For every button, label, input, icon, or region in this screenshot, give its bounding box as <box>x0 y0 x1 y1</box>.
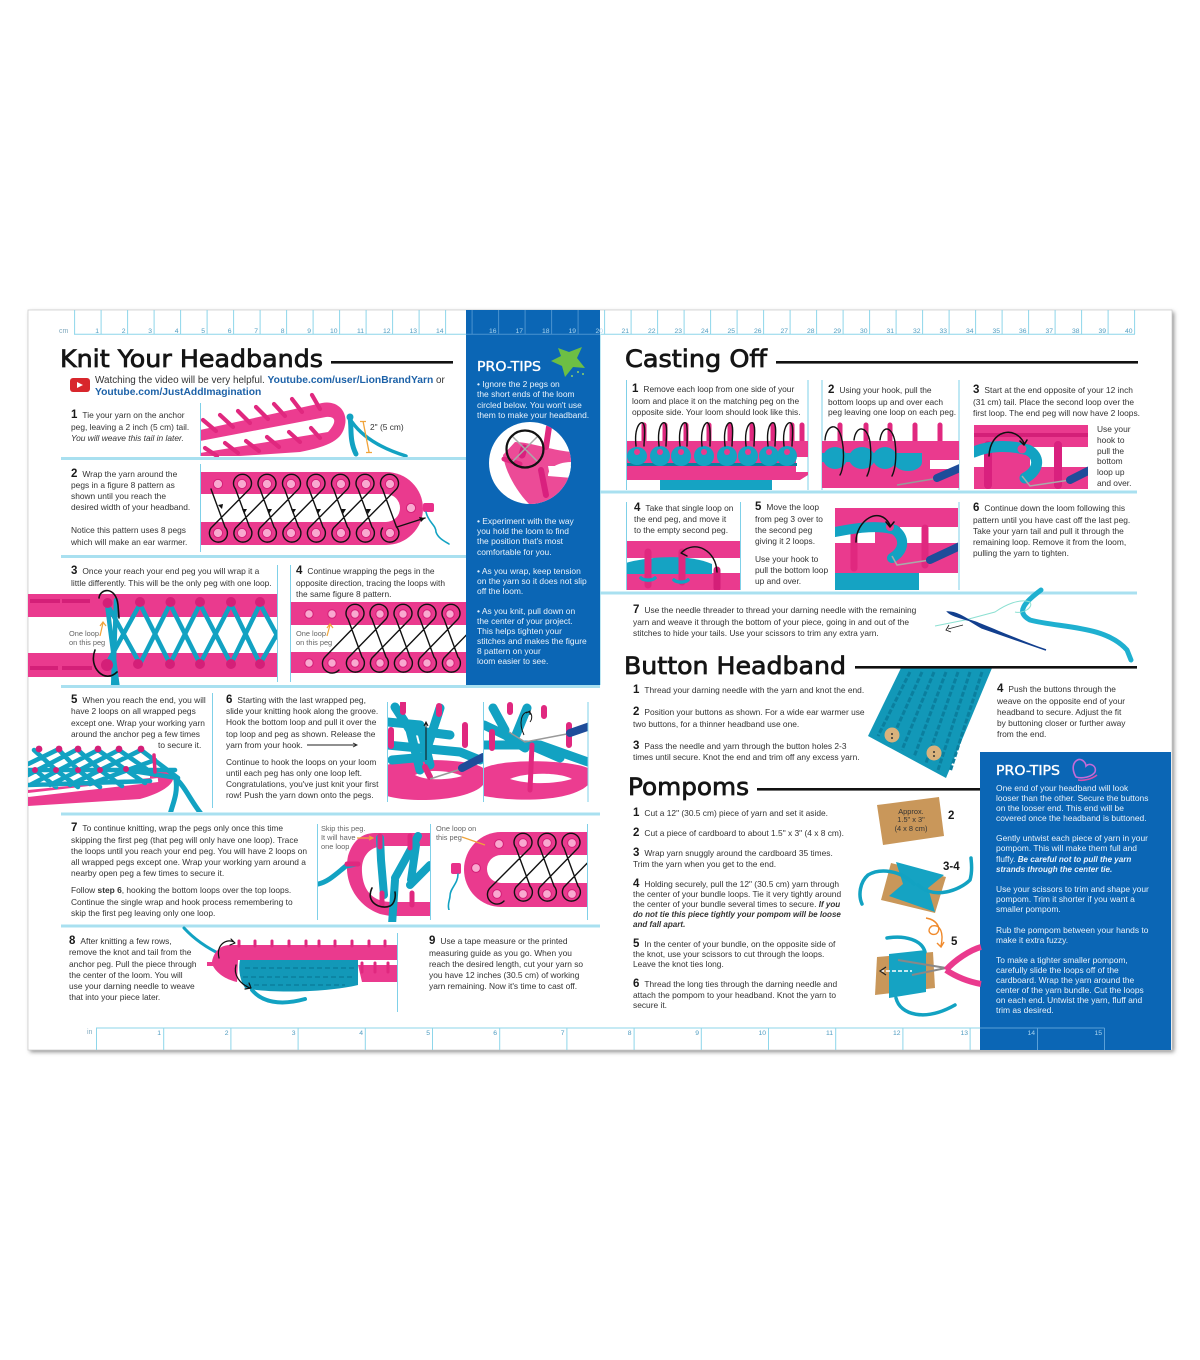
casting step 5 text: pull the bottom loop <box>755 565 828 575</box>
tips text: One end of your headband will look <box>996 783 1129 793</box>
pompom steps text <box>633 807 844 1010</box>
step 9 text <box>429 935 583 991</box>
label: skip peg: one loop <box>321 842 349 851</box>
casting step 1 text: 1 Remove each loop from one side of your <box>632 383 794 395</box>
step 5 text: 5 When you reach the end, you will <box>71 694 206 706</box>
ruler: centimetres: 5 <box>201 328 205 335</box>
step 5 text: except one. Wrap your working yarn <box>71 718 205 728</box>
step 7 text <box>71 822 307 918</box>
step 3 text: 3 Once your reach your end peg you will wrap it a <box>71 565 260 577</box>
heading: pompoms: Pompoms <box>628 773 749 801</box>
casting step 3 side text: hook to <box>1097 435 1125 445</box>
ruler: centimetres: cm <box>59 328 68 335</box>
casting step 2 text <box>828 384 956 417</box>
casting step 5 text: Use your hook to <box>755 554 819 564</box>
step 5 text <box>71 694 206 750</box>
photo: peg three to peg two <box>835 508 960 590</box>
ruler: centimetres: 31 <box>886 328 894 335</box>
step 9 text: yarn remaining. Now it's time to cast off. <box>429 981 577 991</box>
tips text: pompom. This will make them full and <box>996 843 1137 853</box>
button step 4 text: weave on the opposite end of your <box>996 696 1125 706</box>
casting step 3 side text: bottom <box>1097 456 1123 466</box>
step 7 text: the loops until you reach your end peg. You will have 2 loops on <box>71 846 307 856</box>
ruler: centimetres: 12 <box>383 328 391 335</box>
ruler: centimetres: 35 <box>992 328 1000 335</box>
tip 1 text: the short ends of the loom <box>477 389 575 399</box>
panel: pro-tips left: 16 <box>489 328 497 335</box>
ruler: centimetres: 9 <box>307 328 311 335</box>
label: skip peg: Skip this peg. <box>321 824 365 833</box>
video intro text <box>95 375 446 398</box>
ruler: inches: 11 <box>826 1030 833 1037</box>
icon: video play <box>70 378 90 392</box>
casting step 7 text: 7 Use the needle threader to thread your darning needle with the remaining <box>633 604 917 616</box>
step 7 text: 7 To continue knitting, wrap the pegs only once this time <box>71 822 283 834</box>
ruler: centimetres: 39 <box>1098 328 1106 335</box>
step 8 text <box>69 935 197 1002</box>
tip 4 text: 8 pattern on your <box>477 646 541 656</box>
step 9 text: reach the desired length, cut your yarn so <box>429 959 583 969</box>
panel: pro-tips left: 19 <box>568 328 576 335</box>
casting step 5 text: 5 Move the loop <box>755 501 819 513</box>
tips text: To make a tighter smaller pompom, <box>996 955 1128 965</box>
step 2 text: shown until you reach the <box>71 491 166 501</box>
photo: move single loop <box>626 541 740 590</box>
tip 2 text: you hold the loom to find <box>477 526 569 536</box>
casting step 7 text: stitches to hide your tails. Use your scissors to trim any extra yarn. <box>633 628 879 638</box>
ruler: inches: 7 <box>561 1030 565 1037</box>
casting step 6 text: pulling the yarn to tighten. <box>973 548 1069 558</box>
ruler: centimetres: 38 <box>1072 328 1080 335</box>
tips text: cardboard. Wrap the yarn around the <box>996 975 1135 985</box>
step 7 text: Continue the single wrap and hook process remembering to <box>71 897 293 907</box>
ruler: inches: 5 <box>426 1030 430 1037</box>
tips text: trim as desired. <box>996 1005 1054 1015</box>
step 6 text: Congratulations, you've just knit your first <box>226 779 379 789</box>
casting step 3 side text: and over. <box>1097 478 1131 488</box>
ruler: centimetres: 28 <box>807 328 815 335</box>
ruler: centimetres <box>59 322 1136 335</box>
step 2 text: desired width of your headband. <box>71 502 190 512</box>
step 5 text: to secure it. <box>158 740 201 750</box>
button step 4 text: 4 Push the buttons through the <box>997 683 1116 695</box>
step 6 text: until each peg has only one loop left. <box>226 768 362 778</box>
button steps text: 2 Position your buttons as shown. For a wide ear warmer use <box>633 706 865 718</box>
ruler: inches: 12 <box>893 1030 901 1037</box>
diagram: figure 8 loom <box>200 472 449 545</box>
label: skip peg <box>321 824 373 851</box>
illustration: cardboard piece <box>877 797 954 845</box>
casting step 3 side text: loop up <box>1097 467 1125 477</box>
casting step 3 text: 3 Start at the end opposite of your 12 inch <box>973 384 1133 396</box>
ruler: inches: 13 <box>960 1030 968 1037</box>
tips text: center of the yarn bundle. Cut the loops <box>996 985 1144 995</box>
ruler: centimetres: 32 <box>913 328 921 335</box>
casting step 2 text: peg leaving one loop on each peg. <box>828 407 956 417</box>
ruler: centimetres: 25 <box>727 328 735 335</box>
photo: pull loops <box>822 425 960 488</box>
pompom steps text: 2 Cut a piece of cardboard to about 1.5" x 3" (4 x 8 cm). <box>633 827 844 839</box>
ruler: centimetres: 24 <box>701 328 709 335</box>
label: one loop: One loop <box>69 629 99 638</box>
ruler: centimetres: 6 <box>228 328 232 335</box>
step 8 text: 8 After knitting a few rows, <box>69 935 172 947</box>
photo: skip first peg <box>318 833 430 925</box>
casting step 2 text: 2 Using your hook, pull the <box>828 384 932 396</box>
tips text: looser than the other. Secure the buttons <box>996 793 1148 803</box>
tips text <box>996 783 1149 1015</box>
tip 4 text: stitches and makes the figure <box>477 636 587 646</box>
tips text: on each end. Untwist the yarn, fluff and <box>996 995 1142 1005</box>
ruler: centimetres: 10 <box>330 328 338 335</box>
heading: knit your headbands: Knit Your Headbands <box>60 345 323 373</box>
button step 4 text: headband to secure. Adjust the fit <box>997 707 1122 717</box>
panel: pro-tips left <box>466 310 603 685</box>
label: one loop on this peg: this peg <box>436 833 462 842</box>
photo: loom with tail <box>200 395 406 456</box>
ruler: centimetres: 26 <box>754 328 762 335</box>
button steps text: two buttons, for a thinner headband use one. <box>633 719 799 729</box>
casting step 7 text: yarn and weave it through the bottom of your piece, going in and out of the <box>633 617 909 627</box>
ruler: centimetres: 34 <box>966 328 974 335</box>
tip 4 text: • As you knit, pull down on <box>477 606 575 616</box>
photo: hook lift <box>387 703 483 800</box>
pompom steps text: Leave the knot ties long. <box>633 959 724 969</box>
icon: heart <box>1073 759 1097 780</box>
ruler: centimetres: 33 <box>939 328 947 335</box>
step 2 text: Notice this pattern uses 8 pegs <box>71 525 186 535</box>
illustration: cardboard piece: (4 x 8 cm) <box>895 824 927 833</box>
page shadow <box>30 312 1174 1052</box>
step 7 text: Follow step 6, hooking the bottom loops over the top loops. <box>71 885 291 895</box>
casting step 6 text: pattern until you have cast off the last peg. <box>973 515 1130 525</box>
step 4 text: 4 Continue wrapping the pegs in the <box>296 565 435 577</box>
diagram: single wrap loom <box>448 832 602 910</box>
casting step 6 text: remaining loop. Remove it from the loom, <box>973 537 1126 547</box>
casting step 4 text: the end peg, and move it <box>634 514 727 524</box>
button step 4 text: by buttoning closer or further away <box>997 718 1126 728</box>
ruler: centimetres: 22 <box>648 328 656 335</box>
step 6 text: row! Push the yarn down onto the pegs. <box>226 790 374 800</box>
tip 1 text: circled below. You won't use <box>477 400 582 410</box>
step 7 text: all wrapped pegs except one. Wrap your working yarn around a <box>71 857 306 867</box>
ruler: centimetres: 2 <box>122 328 126 335</box>
photo: finished rows <box>184 928 397 1002</box>
photo: loom with tail: 2" (5 cm) <box>370 422 404 432</box>
casting step 3 text <box>973 384 1140 418</box>
icon: orange curl arrow <box>926 918 944 947</box>
photo: second loop over first <box>974 425 1090 489</box>
casting step 1 text: loom and place it on the matching peg on the <box>632 396 799 406</box>
step 3 text: little differently. This will be the only peg with one loop. <box>71 578 272 588</box>
casting step 4 text: 4 Take that single loop on <box>634 502 734 514</box>
tip 4 text: the center of your project. <box>477 616 573 626</box>
label: skip peg: It will have <box>321 833 356 842</box>
tip 4 text: loom easier to see. <box>477 656 548 666</box>
step 6 text <box>226 694 379 800</box>
photo: anchor peg <box>28 746 202 815</box>
tip 2 text: comfortable for you. <box>477 547 552 557</box>
pompom steps text: 5 In the center of your bundle, on the opposite side of <box>633 938 836 950</box>
ruler: centimetres: 23 <box>674 328 682 335</box>
tips text: covered once the headband is buttoned. <box>996 813 1147 823</box>
ruler: centimetres: 11 <box>357 328 364 335</box>
ruler: centimetres: 8 <box>281 328 285 335</box>
step 6 text: Hook the bottom loop and pull it over the <box>226 717 377 727</box>
pompom steps text: 4 Holding securely, pull the 12" (30.5 cm) yarn through <box>633 878 839 890</box>
tips text: on the looser end. This end will be <box>996 803 1124 813</box>
pompom steps text: Trim the yarn when you get to the end. <box>633 859 776 869</box>
panel: pro-tips right: 15 <box>1094 1030 1102 1037</box>
tips text: strands through the center tie. <box>996 865 1112 874</box>
ruler: centimetres: 27 <box>780 328 788 335</box>
casting step 5 text <box>755 501 828 586</box>
tips text: Gently untwist each piece of yarn in your <box>996 833 1148 843</box>
photo: circled end pegs <box>489 422 575 505</box>
ruler: centimetres: 37 <box>1045 328 1053 335</box>
casting step 7 text <box>633 604 917 638</box>
photo: loops moved <box>627 423 808 490</box>
ruler: centimetres: 3 <box>148 328 152 335</box>
button steps text: times until secure. Knot the end and trim off any excess yarn. <box>633 752 860 762</box>
tip 1 text: them to make your headband. <box>477 410 589 420</box>
tip 4 text: This helps tighten your <box>477 626 562 636</box>
tip 2 text <box>477 516 575 557</box>
illustration: cutting the bundle <box>875 936 981 1015</box>
step 2 text: 2 Wrap the yarn around the <box>71 468 178 480</box>
pompom steps text: attach the pompom to your headband. Knot the yarn to <box>633 990 836 1000</box>
tips text: make it extra fuzzy. <box>996 935 1068 945</box>
tip 3 text <box>477 566 587 596</box>
illustration: cardboard piece: 1.5" x 3" <box>897 815 925 824</box>
step 9 text: you have 12 inches (30.5 cm) of working <box>429 970 580 980</box>
casting step 5 text: the second peg <box>755 525 813 535</box>
casting step 1 text <box>632 383 801 417</box>
casting step 6 text: Take your yarn tail and pull it through the <box>973 526 1124 536</box>
step 3 text <box>71 565 272 588</box>
casting step 1 text: opposite side. Your loom should look like this. <box>632 407 801 417</box>
photo: knitted headband with buttons <box>868 668 992 778</box>
tip 3 text: off the loom. <box>477 586 523 596</box>
step 2 text: pegs in a figure 8 pattern as <box>71 480 175 490</box>
casting step 6 text: 6 Continue down the loom following this <box>973 502 1125 514</box>
diagram: opposite direction wrap <box>291 602 482 673</box>
panel: pro-tips right: 14 <box>1027 1030 1035 1037</box>
panel: pro-tips right <box>980 752 1171 1050</box>
ruler: centimetres: 30 <box>860 328 868 335</box>
pompom steps text: and fall apart. <box>633 920 685 929</box>
button steps text: 3 Pass the needle and yarn through the button holes 2-3 <box>633 740 847 752</box>
button steps text: 1 Thread your darning needle with the yarn and knot the end. <box>633 684 864 696</box>
ruler: centimetres: 14 <box>436 328 444 335</box>
casting step 5 text: up and over. <box>755 576 801 586</box>
button step 4 text: from the end. <box>997 729 1046 739</box>
button steps text <box>633 684 865 762</box>
label: one loop: on this peg <box>296 638 332 647</box>
step 8 text: use your darning needle to weave <box>69 981 195 991</box>
step 9 text: measuring guide as you go. When you <box>429 948 572 958</box>
heading: button headband: Button Headband <box>624 652 846 680</box>
ruler: inches: in <box>87 1029 93 1036</box>
pompom steps text: 6 Thread the long ties through the darning needle and <box>633 978 838 990</box>
tips text: pompom. Trim it shorter if you want a <box>996 894 1135 904</box>
booklet page <box>28 310 1172 1050</box>
label: one loop: One loop <box>296 629 326 638</box>
step 1 text: 1 Tie your yarn on the anchor <box>71 409 185 421</box>
label: one loop on this peg <box>436 824 485 845</box>
heading: casting off: Casting Off <box>625 345 767 373</box>
step 8 text: the center of the loom. You will <box>69 970 183 980</box>
step 5 text: have 2 loops on all wrapped pegs <box>71 706 196 716</box>
step 5 text: around the anchor peg a few times <box>71 729 200 739</box>
casting step 5 text: giving it 2 loops. <box>755 536 815 546</box>
ruler: centimetres: 21 <box>621 328 629 335</box>
step 4 text: opposite direction, tracing the loops with <box>296 578 445 588</box>
step 2 text <box>70 468 190 547</box>
ruler: inches: 1 <box>157 1030 161 1037</box>
pompom steps text: the center of your bundle several times to secure. If you <box>633 899 840 909</box>
casting step 3 side text <box>1097 424 1131 488</box>
ruler: inches: 8 <box>628 1030 632 1037</box>
tip 2 text: • Experiment with the way <box>477 516 575 526</box>
panel: pro-tips left: 18 <box>542 328 550 335</box>
ruler: centimetres: 4 <box>175 328 179 335</box>
casting step 5 text: from peg 3 over to <box>755 514 823 524</box>
label: one loop <box>69 622 106 647</box>
tips text: fluffy. Be careful not to pull the yarn <box>996 854 1131 864</box>
tip 2 text: the position that's most <box>477 536 564 546</box>
casting step 6 text <box>973 502 1130 558</box>
ruler: inches: 4 <box>359 1030 363 1037</box>
casting step 3 side text: Use your <box>1097 424 1131 434</box>
photo: hook over peg <box>484 705 590 800</box>
pompom steps text: do not tie this piece tightly your pompom will be loose <box>633 910 841 919</box>
icon: green star <box>551 347 585 377</box>
tip 4 text <box>477 606 587 666</box>
arrow: to photos <box>307 743 357 747</box>
tip 3 text: on the yarn so it does not slip <box>477 576 587 586</box>
pompom steps text: 3 Wrap yarn snuggly around the cardboard 35 times. <box>633 847 833 859</box>
tips text: Use your scissors to trim and shape your <box>996 884 1149 894</box>
step 6 text: slide your knitting hook along the groove. <box>226 706 378 716</box>
pompom steps text: secure it. <box>633 1000 667 1010</box>
illustration: cardboard piece: 2 <box>948 810 954 822</box>
illustration: wrapped and tied bundle <box>860 858 972 913</box>
label: one loop: on this peg <box>69 638 105 647</box>
ruler: centimetres: 13 <box>409 328 417 335</box>
step 6 text: yarn from your hook. <box>226 740 303 750</box>
photo: end peg wrap <box>28 591 285 690</box>
step 4 text: the same figure 8 pattern. <box>296 589 391 599</box>
button step 4 text <box>996 683 1126 739</box>
pompom steps text: the knot, use your scissors to cut through the loops. <box>633 949 824 959</box>
step 8 text: that into your piece later. <box>69 992 160 1002</box>
step 2 text: which will make an ear warmer. <box>70 537 187 547</box>
label: one loop on this peg: One loop on <box>436 824 476 833</box>
ruler: inches: 6 <box>493 1030 497 1037</box>
tips text: Rub the pompom between your hands to <box>996 925 1149 935</box>
label: one loop <box>296 624 333 647</box>
step 8 text: remove the knot and tail from the <box>69 947 192 957</box>
casting step 3 text: first loop. The end peg will now have 2 loops. <box>973 408 1140 418</box>
ruler: inches: 9 <box>695 1030 699 1037</box>
step 1 text: peg, leaving a 2 inch (5 cm) tail. <box>71 422 189 432</box>
casting step 3 side text: pull the <box>1097 446 1124 456</box>
ruler: centimetres: 1 <box>95 328 99 335</box>
tip 3 text: • As you wrap, keep tension <box>477 566 581 576</box>
video intro text: Youtube.com/JustAddImagination <box>95 387 261 398</box>
step 4 text <box>296 565 445 599</box>
ruler: centimetres: 40 <box>1125 328 1133 335</box>
video intro text: Watching the video will be very helpful. Youtube.com/user/LionBrandYarn or <box>95 375 446 386</box>
ruler: inches: 10 <box>758 1030 766 1037</box>
tips text: smaller pompom. <box>996 904 1061 914</box>
heading: pro-tips: PRO-TIPS <box>996 764 1060 779</box>
tip 1 text: • Ignore the 2 pegs on <box>477 379 560 389</box>
tip 1 text <box>477 379 589 420</box>
step 6 text: 6 Starting with the last wrapped peg, <box>226 694 366 706</box>
step 6 text: Continue to hook the loops on your loom <box>226 757 376 767</box>
ruler: centimetres: 29 <box>833 328 841 335</box>
panel: pro-tips left: 17 <box>515 328 523 335</box>
step 1 text <box>71 409 189 443</box>
pompom steps text: the center of your bundle loops. Tie it very tightly around <box>633 889 841 899</box>
tips text: carefully slide the loops off of the <box>996 965 1119 975</box>
illustration: wrapped and tied bundle: 3-4 <box>943 861 960 873</box>
step 7 text: skipping the first peg (that peg will only have one loop). Trace <box>71 835 299 845</box>
heading: pro-tips: PRO-TIPS <box>477 360 541 375</box>
step 1 text: You will weave this tail in later. <box>71 433 184 443</box>
ruler: inches: 2 <box>225 1030 229 1037</box>
ruler: inches <box>87 1028 1105 1039</box>
casting step 4 text: to the empty second peg. <box>634 525 728 535</box>
ruler: centimetres: 36 <box>1019 328 1027 335</box>
step 7 text: nearby open peg a few times to secure it. <box>71 868 224 878</box>
ruler: centimetres: 7 <box>254 328 258 335</box>
illustration: cutting the bundle: 5 <box>951 936 958 948</box>
illustration: darning needle with yarn <box>935 590 1131 660</box>
pompom steps text: 1 Cut a 12" (30.5 cm) piece of yarn and set it aside. <box>633 807 828 819</box>
panel: pro-tips left: 20 <box>595 328 603 335</box>
casting step 2 text: bottom loops up and over each <box>828 397 943 407</box>
step 6 text: top loop and peg as shown. Release the <box>226 729 376 739</box>
step 9 text: 9 Use a tape measure or the printed <box>429 935 568 947</box>
casting step 4 text <box>634 502 734 535</box>
casting step 3 text: (31 cm) tail. Place the second loop over the <box>973 397 1134 407</box>
step 7 text: skip the first peg leaving only one loop. <box>71 908 215 918</box>
illustration: cardboard piece: Approx. <box>898 807 924 816</box>
step 8 text: anchor peg. Pull the piece through <box>69 959 197 969</box>
ruler: inches: 3 <box>292 1030 296 1037</box>
